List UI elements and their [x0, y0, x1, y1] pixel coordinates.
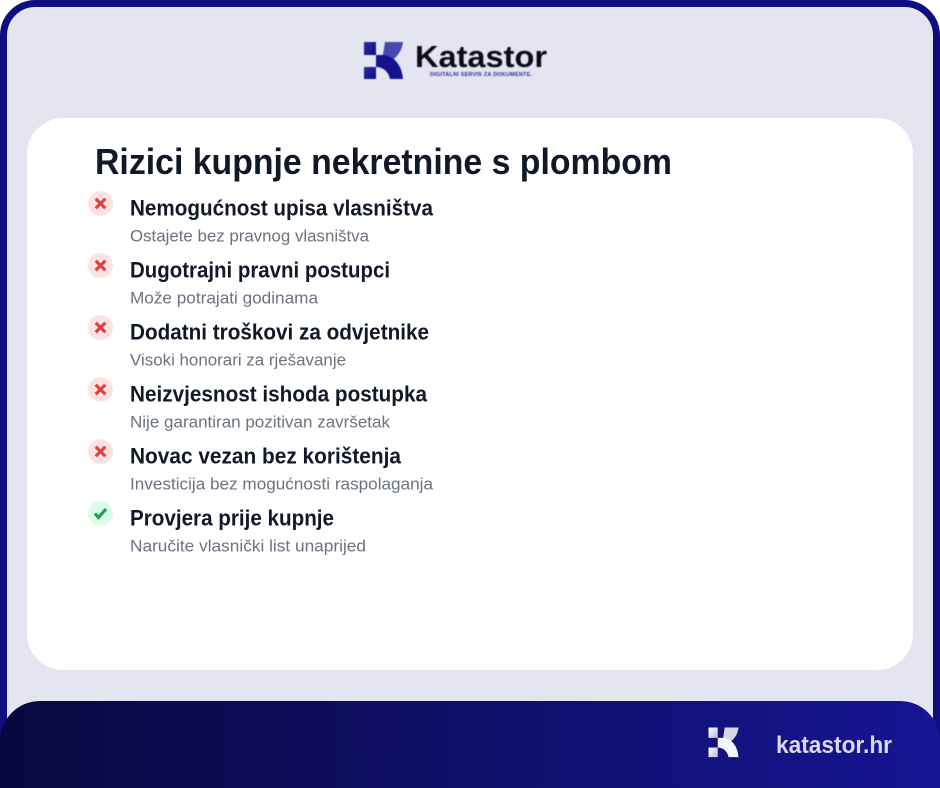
item heading: Dodatni troškovi za odvjetnike [130, 320, 429, 344]
item heading: Provjera prije kupnje [130, 506, 334, 530]
item: nemogućnost upisa [88, 191, 434, 246]
item description: Ostajete bez pravnog vlasništva [130, 226, 370, 246]
logo wordmark: Katastor [415, 39, 547, 74]
icon: red cross [88, 315, 113, 340]
item: provjera prije kupnje [88, 501, 366, 556]
item heading: Nemogućnost upisa vlasništva [130, 196, 434, 220]
item: dodatni troškovi [88, 315, 429, 370]
icon: red cross [88, 439, 113, 464]
icon: Katastor K mark [364, 42, 403, 79]
panel: risks card [27, 118, 913, 670]
item heading: Dugotrajni pravni postupci [130, 258, 390, 282]
item description: Naručite vlasnički list unaprijed [130, 536, 366, 556]
item heading: Novac vezan bez korištenja [130, 444, 402, 468]
footer bar [0, 701, 940, 788]
icon: red cross [88, 253, 113, 278]
item description: Visoki honorari za rješavanje [130, 350, 346, 370]
icon: red cross [88, 377, 113, 402]
item: novac vezan [88, 439, 434, 494]
icon: footer K mark [708, 728, 739, 757]
item: dugotrajni postupci [88, 253, 390, 308]
item description: Nije garantiran pozitivan završetak [130, 412, 390, 432]
icon: red cross [88, 191, 113, 216]
title: Rizici kupnje nekretnine s plombom [95, 141, 672, 182]
item heading: Neizvjesnost ishoda postupka [130, 382, 428, 406]
item description: Investicija bez mogućnosti raspolaganja [130, 474, 434, 494]
logo tagline: DIGITALNI SERVIS ZA DOKUMENTE. [430, 72, 532, 78]
item description: Može potrajati godinama [130, 288, 319, 308]
icon: green check [88, 501, 113, 526]
item: neizvjesnost ishoda [88, 377, 428, 432]
logo [364, 39, 547, 79]
footer website: katastor.hr [776, 732, 892, 759]
